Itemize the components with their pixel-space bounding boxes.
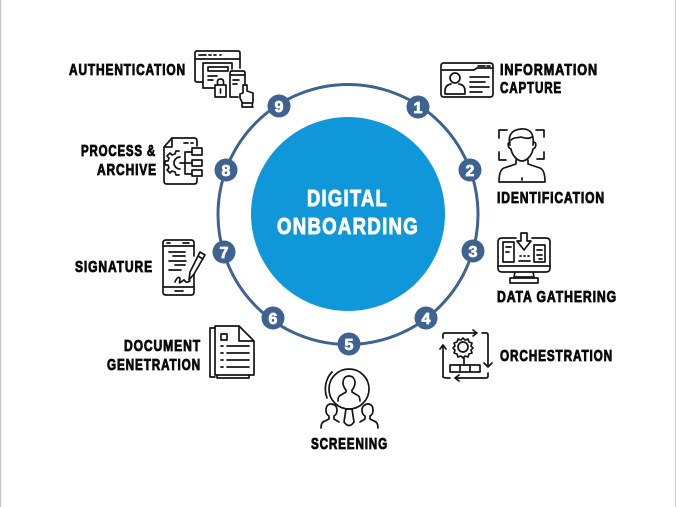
- icon: id card: [441, 63, 493, 97]
- step badge 7: [212, 240, 236, 264]
- label: document generation: GENETRATION: [107, 357, 201, 374]
- icon: browser, phone, lock and hand: [195, 51, 253, 107]
- label: information capture: CAPTURE: [500, 80, 562, 97]
- step badge 8: [214, 158, 238, 182]
- label: signature: SIGNATURE: [75, 259, 153, 276]
- icon: phone with signature pen: [163, 240, 205, 295]
- icon: computer with download: [498, 233, 550, 283]
- icon: face scan: [499, 129, 545, 182]
- step badge 5: 5: [345, 337, 354, 354]
- label: screening: SCREENING: [311, 436, 388, 453]
- label: data gathering: DATA GATHERING: [497, 289, 617, 306]
- label: process and archive: PROCESS &: [81, 143, 156, 160]
- label: information capture: [500, 62, 598, 97]
- label: authentication: AUTHENTICATION: [69, 62, 186, 79]
- step badge 2: 2: [466, 163, 475, 180]
- step badge 9: 9: [275, 99, 284, 116]
- icon: gear document with tree: [164, 138, 202, 184]
- icon: document stack: [210, 326, 254, 378]
- icon: magnifier over people: [321, 369, 378, 428]
- step badge 6: [262, 306, 284, 330]
- label: orchestration: ORCHESTRATION: [500, 348, 613, 365]
- step badge 3: [462, 240, 484, 262]
- label: process and archive: ARCHIVE: [97, 162, 157, 179]
- icon: process cycle with gear: [440, 330, 492, 381]
- step badge 4: [414, 306, 438, 330]
- step badge 1: [406, 96, 430, 118]
- step badge 2: [458, 158, 482, 182]
- label: document generation: DOCUMENT: [124, 338, 201, 355]
- step badge 4: 4: [422, 311, 431, 328]
- step badge 3: 3: [469, 244, 478, 261]
- ring connecting the steps: [218, 84, 478, 344]
- step badge 6: 6: [269, 311, 278, 328]
- centre circle with title: [251, 117, 445, 311]
- label: information capture: INFORMATION: [500, 62, 598, 79]
- label: identification: IDENTIFICATION: [497, 190, 605, 207]
- step badge 8: 8: [222, 163, 231, 180]
- centre circle with title: ONBOARDING: [277, 213, 419, 239]
- step badge 5: [338, 332, 360, 356]
- step badge 7: 7: [220, 245, 229, 262]
- centre circle with title: DIGITAL: [307, 185, 388, 211]
- label: document generation: [107, 338, 201, 374]
- label: process and archive: [81, 143, 157, 179]
- step badge 1: 1: [414, 100, 423, 117]
- step badge 9: [268, 94, 290, 118]
